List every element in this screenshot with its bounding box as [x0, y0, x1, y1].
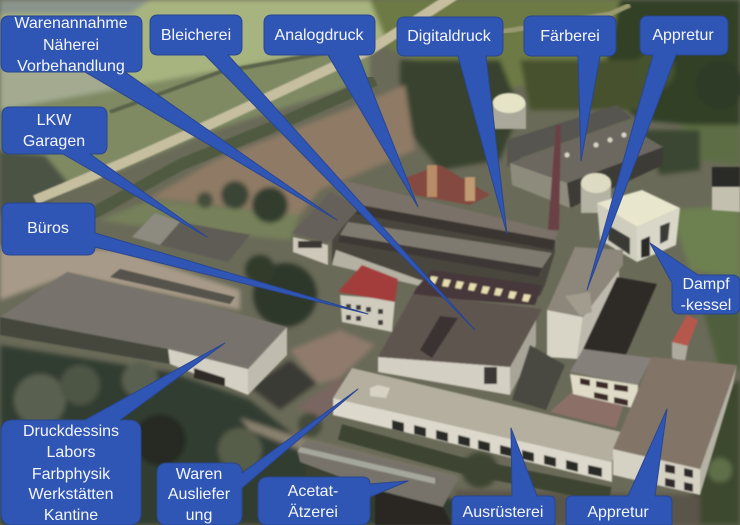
callout: Büros: [2, 203, 368, 314]
callout: Druckdessins Labors Farbphysik Werkstätten Kantine: [1, 343, 225, 525]
callout: Digitaldruck: Digitaldruck: [407, 28, 492, 45]
callout: LKW Garagen: [2, 107, 207, 237]
building: large flat roof hall: [0, 272, 287, 395]
callout: Ausrüsterei: [452, 428, 555, 525]
callout: Appretur upper: Appretur: [652, 27, 714, 44]
callout: Digitaldruck: [397, 17, 507, 234]
building: main print hall with roof rows: [292, 180, 558, 296]
building: dark sawtooth section: [583, 277, 657, 357]
callout: Warenannahme Näherei Vorbehandlung: Vorbehandlung: [17, 58, 125, 75]
building: office house: [338, 265, 398, 332]
road: [35, 0, 455, 200]
building: carport: [110, 269, 235, 304]
building: acetate etching: [297, 440, 458, 525]
callout: Warenannahme Näherei Vorbehandlung: [1, 15, 337, 220]
callout: Waren Auslieferung: [157, 389, 358, 525]
callout: Büros: Büros: [27, 220, 69, 237]
path at top: [500, 5, 630, 32]
callout: Ausrüsterei: Ausrüsterei: [463, 504, 543, 521]
callout: Färberei: Färberei: [540, 28, 600, 45]
callout: Waren Auslieferung: ung: [186, 507, 212, 524]
callout: Druckdessins Labors Farbphysik Werkstätten Kantine: Kantine: [44, 507, 98, 524]
callout: Druckdessins Labors Farbphysik Werkstätten Kantine: Farbphysik: [32, 466, 111, 483]
callout: Färberei: [524, 16, 616, 161]
callout: Bleicherei: [150, 15, 475, 330]
building: L wing right roof: [613, 357, 737, 495]
building: tower block: [547, 247, 623, 359]
callout: Appretur upper: [587, 16, 728, 290]
callout: Dampfkessel: Dampf: [682, 276, 730, 293]
building: small red roof shed: [672, 315, 698, 362]
callout: Druckdessins Labors Farbphysik Werkstätten Kantine: Labors: [47, 444, 95, 461]
callout: Druckdessins Labors Farbphysik Werkstätten Kantine: Druckdessins: [23, 423, 119, 440]
building: rear dyeing hall: [507, 105, 632, 175]
callout: Analogdruck: [264, 15, 418, 207]
courtyard: dark: [512, 345, 565, 410]
chimney: [548, 125, 561, 230]
callout: Waren Auslieferung: Waren: [176, 466, 222, 483]
courtyard: tan: [550, 392, 625, 428]
callout: Acetat-Ätzerei: [258, 477, 408, 525]
callout: Acetat-Ätzerei: Ätzerei: [288, 503, 338, 521]
callout: Analogdruck: Analogdruck: [275, 27, 364, 44]
building: small block with windows: [570, 349, 652, 409]
building: skylight roof: [412, 270, 542, 305]
callout: Dampfkessel: [650, 243, 740, 314]
building: red roof with orange silos: [405, 165, 490, 205]
callout: Bleicherei: Bleicherei: [161, 27, 231, 44]
house top right: [712, 167, 740, 212]
building: bleaching hall: [378, 294, 542, 395]
callout: Warenannahme Näherei Vorbehandlung: Näherei: [43, 37, 99, 54]
callout: LKW Garagen: LKW: [37, 112, 72, 129]
hedge along road: [90, 80, 375, 215]
callout: Appretur lower: Appretur: [587, 504, 649, 521]
building: dyeing hall: [510, 123, 663, 208]
callout: Dampfkessel: -kessel: [681, 297, 731, 314]
tank: lower silo: [581, 173, 611, 213]
building: garages: [132, 213, 250, 262]
tank: upper silo: [492, 93, 526, 129]
callout: Appretur lower: [566, 409, 672, 525]
callout: LKW Garagen: Garagen: [23, 133, 85, 150]
hedge along long hall: [340, 432, 610, 495]
callout: Warenannahme Näherei Vorbehandlung: Warenannahme: [14, 15, 128, 32]
callout: Druckdessins Labors Farbphysik Werkstätten Kantine: Werkstätten: [28, 486, 114, 503]
hedge above road: [110, 52, 330, 112]
callout: Waren Auslieferung: Ausliefer: [168, 486, 231, 503]
building: boiler house: [597, 190, 680, 262]
building: L wing long hall: [333, 368, 621, 482]
callout: Acetat-Ätzerei: Acetat-: [288, 483, 338, 500]
